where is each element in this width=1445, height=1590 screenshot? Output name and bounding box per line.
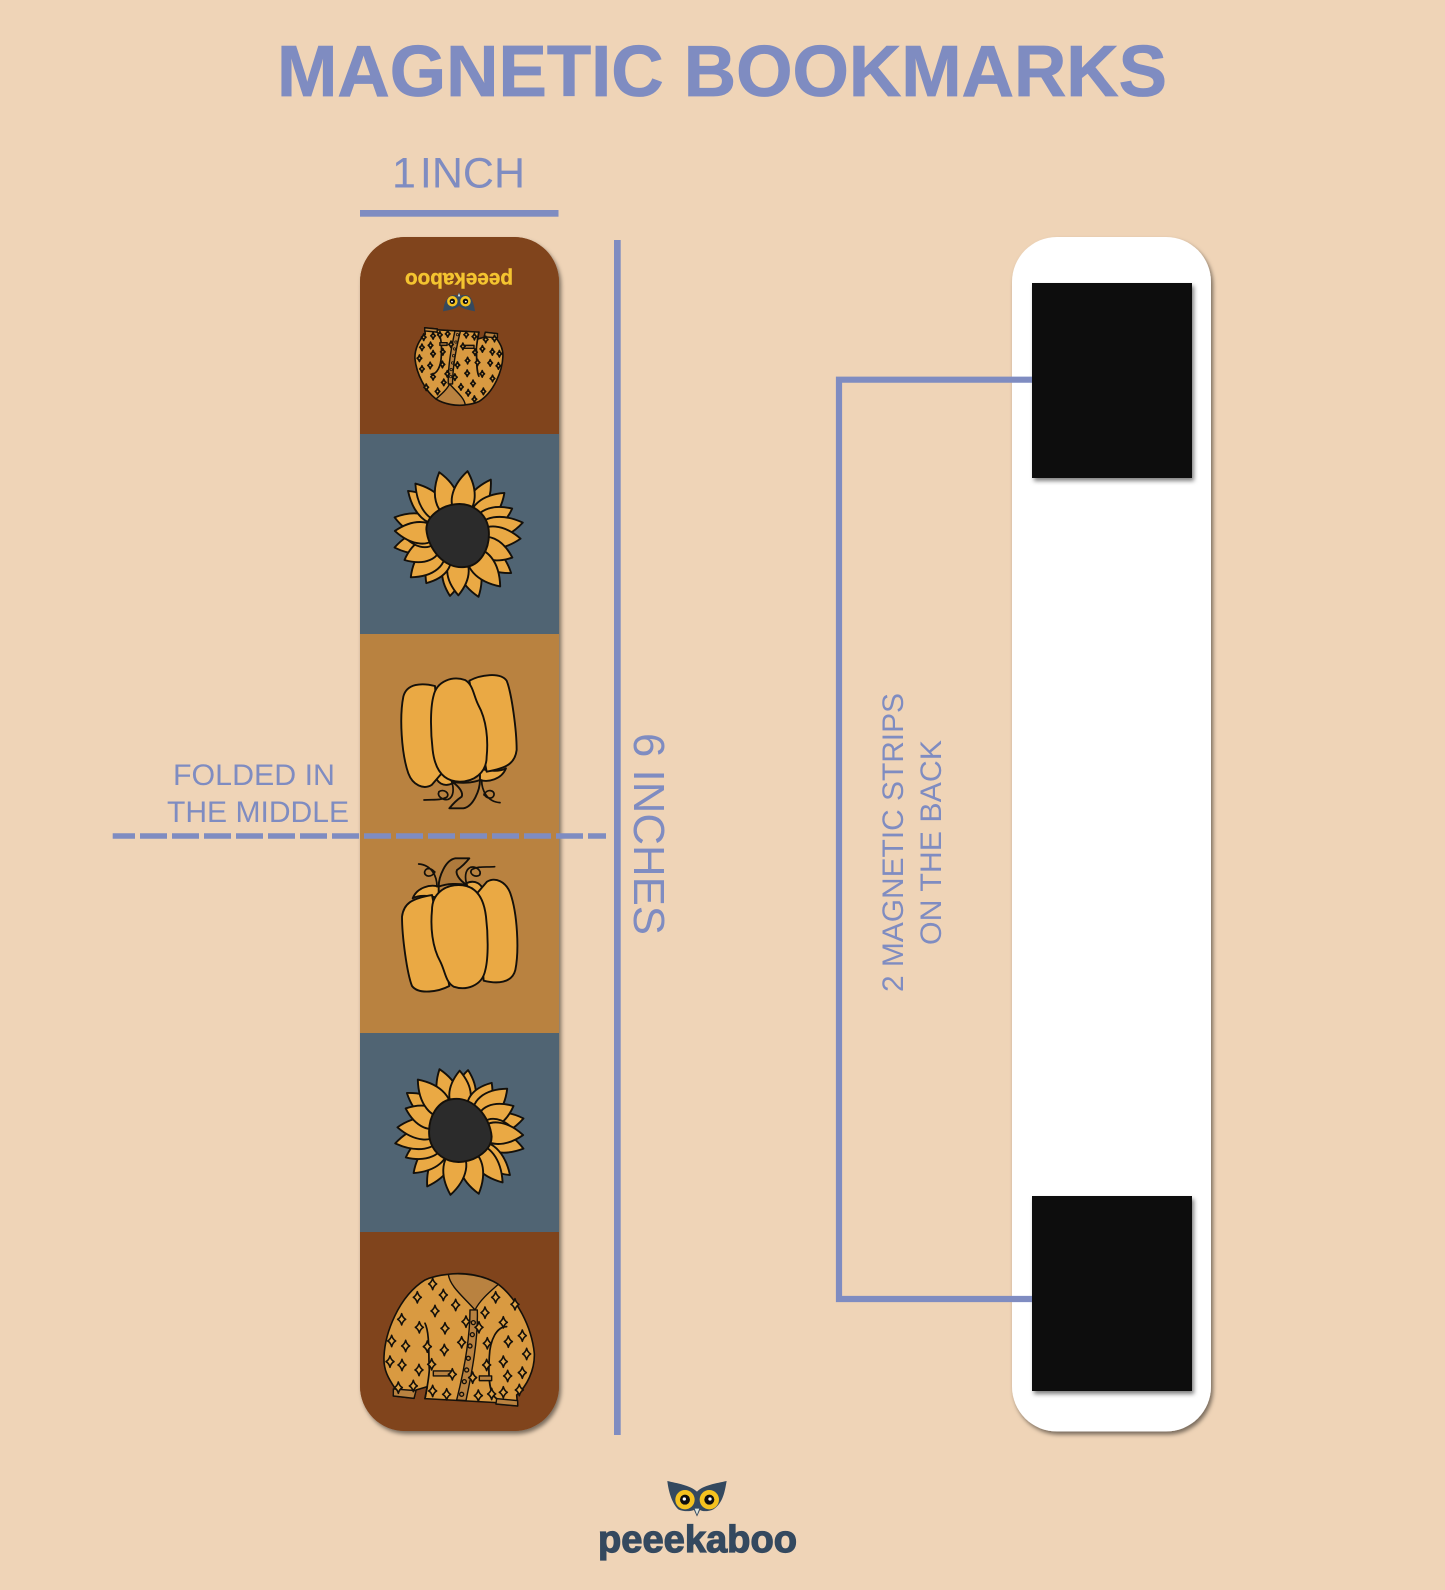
dashed fold line <box>113 833 606 839</box>
icon: small upside-down owl <box>443 292 475 311</box>
height measure line <box>614 240 621 1435</box>
upper magnetic strip <box>1032 283 1192 478</box>
fold label: THE MIDDLE <box>167 796 349 829</box>
icon: lower sunflower <box>393 1066 526 1197</box>
magnetic strips label: ON THE BACK <box>915 740 948 945</box>
icon: small upside-down jacket <box>415 328 503 405</box>
icon: upper sunflower <box>392 469 525 600</box>
front bookmark <box>360 237 559 1431</box>
icon: lower pumpkin <box>402 858 517 992</box>
lower magnetic strip <box>1032 1196 1192 1391</box>
white bookmark back <box>1012 237 1211 1432</box>
fold label <box>167 759 349 829</box>
icon: large jacket <box>384 1274 534 1406</box>
magnetic strips label: 2 MAGNETIC STRIPS <box>877 693 910 992</box>
width measure bar <box>360 210 558 217</box>
height label: 6 inches: 6 INCHES <box>624 733 673 935</box>
fold label: FOLDED IN <box>173 759 335 792</box>
icon: owl <box>667 1481 727 1517</box>
icon: upper pumpkin <box>401 675 517 808</box>
panel: brown bottom <box>360 1386 559 1431</box>
back of bookmark <box>1012 237 1211 1432</box>
brand wordmark: peeekaboo <box>598 1519 797 1561</box>
bookmark colour panels <box>360 237 559 1431</box>
panel: brown top <box>360 237 559 282</box>
magnetic strips label <box>877 693 948 992</box>
bracket connector to strips <box>839 380 1032 1299</box>
panel: slate lower <box>360 1033 559 1232</box>
panel: tan upper <box>360 634 559 834</box>
upside-down brand wordmark: peeekaboo <box>405 268 513 291</box>
bookmark shadow <box>360 237 559 1431</box>
footer logo <box>598 1481 797 1561</box>
panel: tan lower <box>360 834 559 1033</box>
width label: 1 inch: 1 INCH <box>392 150 525 198</box>
panel: slate upper <box>360 434 559 634</box>
title: MAGNETIC BOOKMARKS <box>277 32 1167 112</box>
